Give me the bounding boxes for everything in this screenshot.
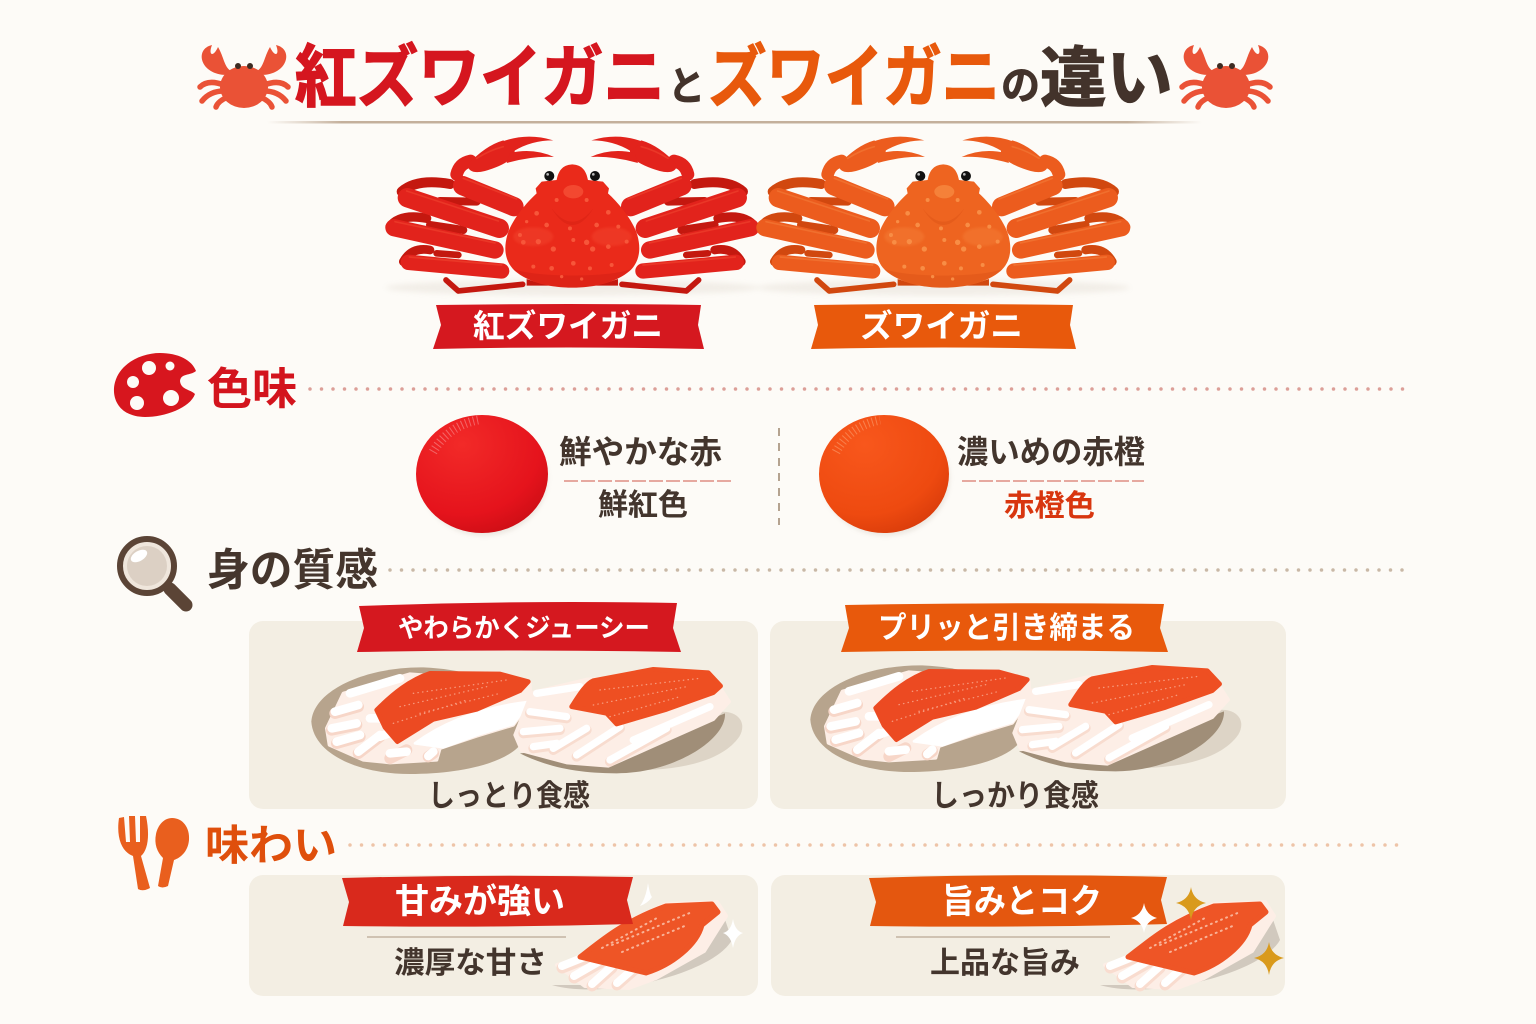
ribbon: strong sweetness [342, 876, 633, 927]
ribbon: firm and tight [841, 603, 1168, 652]
title text: difference: 違い [1040, 41, 1173, 115]
title text: no: の [1001, 64, 1040, 108]
panel: snow crab flavour [771, 875, 1285, 996]
icon: white sparkles [640, 883, 743, 948]
caption: refined umami: 上品な旨み [930, 947, 1080, 980]
section: flavour [118, 816, 1400, 996]
panel: red crab texture [249, 602, 758, 813]
ribbon: red snow crab [433, 304, 704, 349]
ribbon: snow crab: ズワイガニ [860, 308, 1023, 344]
caption: rich sweetness: 濃厚な甘さ [394, 947, 547, 980]
caption: moist texture: しっとり食感 [428, 780, 590, 813]
swatch: deep red-orange [819, 415, 950, 536]
label: vivid red: 鮮やかな赤 [559, 434, 722, 470]
label: vivid red: 鮮紅色 [598, 489, 688, 522]
label: vivid red [559, 434, 731, 522]
ribbon: red snow crab: 紅ズワイガニ [473, 308, 663, 344]
title text: red crab name: 紅ズワイガニ [295, 40, 665, 116]
icon: palette [114, 353, 196, 417]
ribbon: firm and tight: プリッと引き締まる [878, 612, 1135, 645]
icon: left crab [200, 45, 288, 108]
label: deep red-orange: 赤橙色 [1004, 490, 1095, 523]
illustration: red snow crab [386, 137, 759, 296]
heading: texture: 身の質感 [207, 546, 378, 595]
ribbon: umami and depth: 旨みとコク [942, 883, 1102, 921]
swatch: vivid red [416, 415, 548, 536]
panel: snow crab texture [770, 603, 1286, 813]
icon: gold and white sparkles [1131, 887, 1284, 975]
illustration: snow crab piece [1100, 902, 1280, 989]
illustration: crab meat [311, 667, 742, 774]
ribbon: strong sweetness: 甘みが強い [395, 882, 565, 921]
label: deep red-orange [957, 434, 1145, 523]
title text: connector to: と [668, 65, 705, 109]
illustration: red crab piece [552, 902, 732, 989]
icon: right crab [1182, 45, 1270, 108]
crab comparison [386, 137, 1130, 349]
icon: magnifier [120, 539, 186, 605]
panel: red crab flavour [249, 875, 758, 996]
ribbon: soft and juicy [357, 602, 681, 652]
illustration: snow crab [757, 137, 1130, 296]
illustration: firm crab meat [810, 665, 1241, 772]
caption: firm texture: しっかり食感 [931, 780, 1099, 813]
heading: flavour: 味わい [205, 822, 337, 869]
label: deep red-orange: 濃いめの赤橙 [957, 434, 1145, 470]
ribbon: soft and juicy: やわらかくジューシー [398, 613, 650, 643]
icon: fork and spoon [118, 816, 189, 890]
ribbon: umami and depth [869, 875, 1167, 927]
section: colour [114, 353, 1406, 536]
title [200, 40, 1270, 116]
title text: orange crab name: ズワイガニ [708, 40, 1000, 116]
heading: colour: 色味 [207, 365, 297, 414]
ribbon: snow crab [811, 304, 1076, 349]
section: texture [120, 539, 1406, 813]
